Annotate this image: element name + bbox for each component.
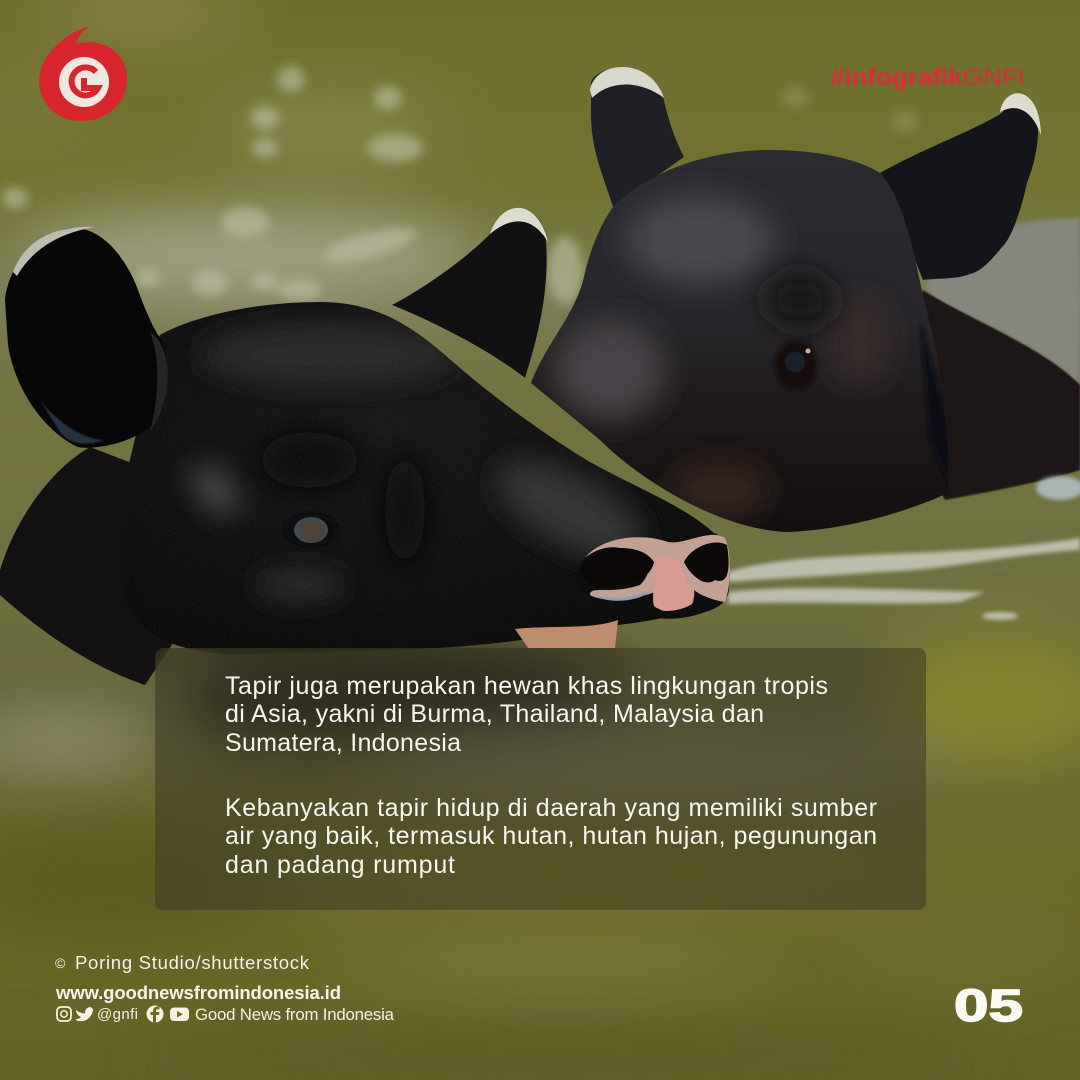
hashtag: #infografik GNFI — [830, 64, 1025, 90]
paragraph 2: Kebanyakan tapir hidup di daerah yang memiliki sumber — [225, 794, 877, 822]
text panel — [155, 648, 926, 910]
reflection highlights on water at right — [728, 476, 1080, 620]
icon: twitter — [76, 1007, 93, 1021]
icon: instagram — [57, 1007, 71, 1021]
social line — [57, 1005, 395, 1024]
photo credit: © — [55, 955, 66, 971]
channel name: Good News from Indonesia — [195, 1005, 395, 1024]
icon: youtube — [170, 1008, 189, 1021]
paragraph 1: Tapir juga merupakan hewan khas lingkungan tropis — [225, 672, 828, 700]
page number: 05 — [954, 980, 1023, 1031]
logo — [39, 26, 127, 121]
paragraph 1: di Asia, yakni di Burma, Thailand, Malaysia dan — [225, 700, 764, 728]
handle: @gnfi — [97, 1006, 138, 1023]
paragraph 2: dan padang rumput — [225, 851, 455, 879]
icon: facebook — [146, 1006, 164, 1023]
paragraph 1: Sumatera, Indonesia — [225, 729, 461, 757]
paragraph 2: air yang baik, termasuk hutan, hutan hujan, pegunungan — [225, 822, 877, 850]
paragraph 1 — [225, 672, 828, 757]
back tapir — [531, 67, 1080, 532]
front tapir — [0, 208, 740, 685]
website: www.goodnewsfromindonesia.id — [55, 982, 341, 1003]
paragraph 2 — [225, 794, 877, 879]
photo credit: Poring Studio/shutterstock — [75, 952, 310, 973]
nose — [575, 533, 730, 619]
